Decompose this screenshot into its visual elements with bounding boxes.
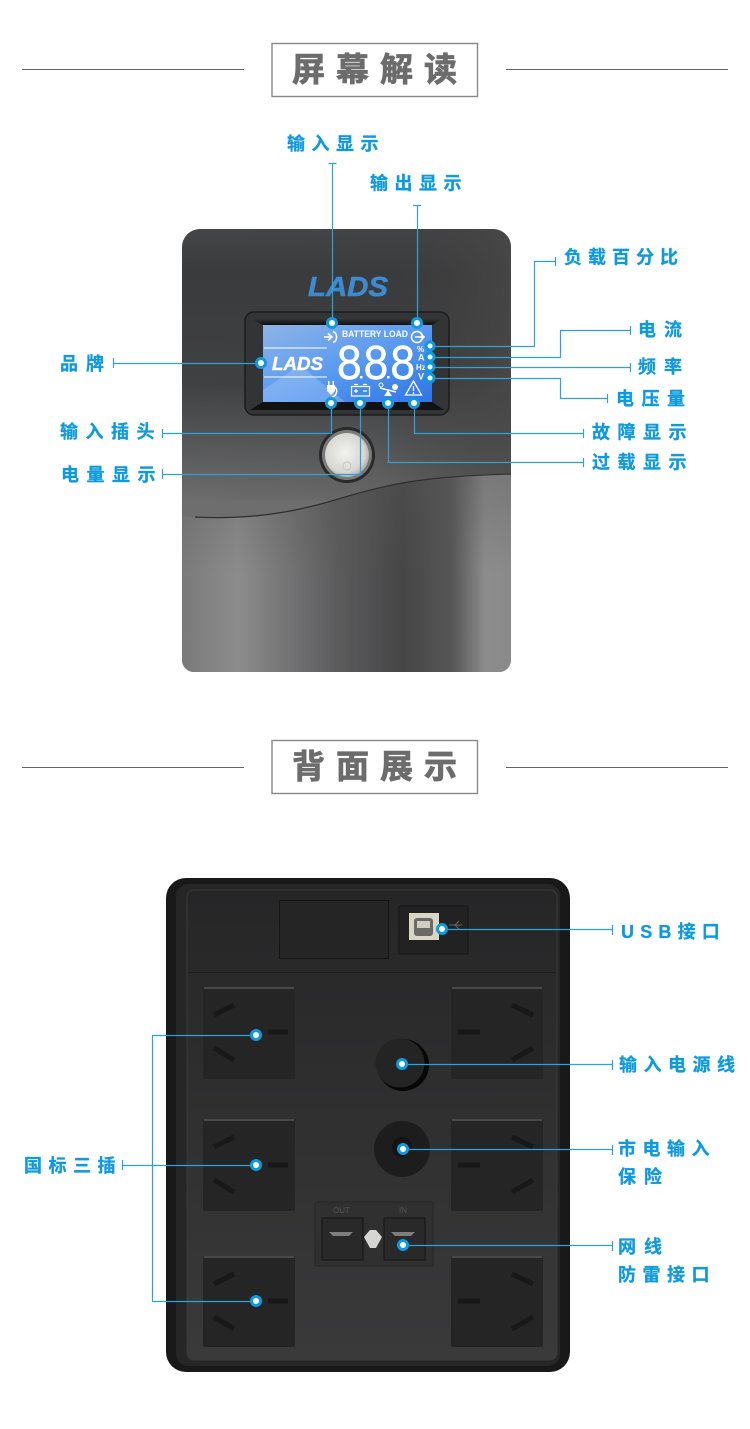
lower body panel (182, 474, 511, 672)
callout: brand (60, 354, 266, 374)
LCD screen (263, 325, 432, 402)
surge symbol (364, 1230, 382, 1248)
unit letter Hz: Hz (416, 363, 426, 372)
callout: mains fuse: 市电输入 (618, 1138, 716, 1159)
callout: output display (370, 172, 468, 328)
icon: output arrow (412, 332, 424, 342)
front body (182, 229, 511, 672)
unit letter V: V (418, 372, 424, 382)
callout: network surge (398, 1237, 716, 1285)
callout: input plug (60, 398, 336, 442)
in label: IN (399, 1206, 407, 1215)
callout: network surge: 网线 (618, 1237, 670, 1257)
callout: USB: USB接口 (621, 922, 726, 942)
callout: fault (410, 398, 694, 442)
label plate (280, 900, 388, 958)
callout: voltage: 电压量 (616, 389, 692, 409)
battery load text: BATTERY LOAD (342, 329, 408, 339)
callout: voltage (426, 374, 692, 409)
icon: plug (327, 381, 337, 397)
icon: input arrow (324, 332, 337, 342)
power button (319, 427, 375, 483)
callout: battery level (61, 398, 364, 485)
callout: overload (384, 398, 694, 472)
callout: national standard sockets: 国标三插 (24, 1156, 122, 1176)
callout: input display (287, 133, 385, 328)
callout: frequency: 频率 (638, 357, 690, 377)
fuse holder (374, 1121, 430, 1177)
callout: load percent (426, 248, 684, 350)
callout: overload: 过载显示 (592, 452, 694, 472)
unit percent: % (417, 345, 424, 354)
callout: national standard sockets (24, 1030, 260, 1306)
callout: network surge: 防雷接口 (618, 1264, 716, 1285)
callout: battery level: 电量显示 (61, 465, 163, 485)
section heading: rear: 背面展示 (292, 748, 468, 785)
callout: mains fuse: 保险 (618, 1166, 670, 1187)
section heading: screen: 屏幕解读 (292, 51, 468, 88)
icon: warning triangle (406, 381, 422, 395)
brand logo: LADS (308, 271, 388, 302)
callout: fault: 故障显示 (592, 422, 694, 442)
callout: output display: 输出显示 (370, 172, 468, 194)
USB port (409, 913, 439, 940)
display bezel (245, 312, 449, 415)
section heading: rear (22, 740, 728, 794)
UPS rear view (166, 878, 570, 1372)
unit letter A: A (418, 352, 425, 362)
rear panel (187, 890, 557, 1360)
decimal points (360, 376, 390, 378)
callout: load percent: 负载百分比 (564, 248, 684, 268)
callout: current (426, 320, 690, 361)
section heading: screen (22, 44, 728, 96)
callout: frequency (426, 357, 690, 377)
callout: input display: 输入显示 (287, 133, 385, 154)
sockets (203, 987, 543, 1347)
UPS front view (182, 229, 511, 672)
rear housing (166, 878, 570, 1372)
callout: input plug: 输入插头 (60, 421, 162, 442)
seven segment readout: 888 (336, 338, 416, 395)
callout: mains fuse (398, 1138, 716, 1187)
USB plate (399, 906, 468, 954)
icon: overload seesaw (379, 383, 398, 396)
LCD logo: LADS (272, 354, 323, 374)
network protection panel (315, 1202, 433, 1266)
callout: current: 电流 (638, 320, 690, 340)
callout: power cord (398, 1054, 742, 1075)
power cord grommet (376, 1038, 429, 1091)
socket pins (214, 1005, 533, 1329)
icon: battery (352, 384, 370, 396)
callout: power cord: 输入电源线 (619, 1054, 742, 1075)
out label: OUT (333, 1206, 350, 1215)
callout: brand: 品牌 (60, 354, 112, 374)
callout: USB (438, 922, 726, 942)
USB symbol (449, 921, 462, 929)
